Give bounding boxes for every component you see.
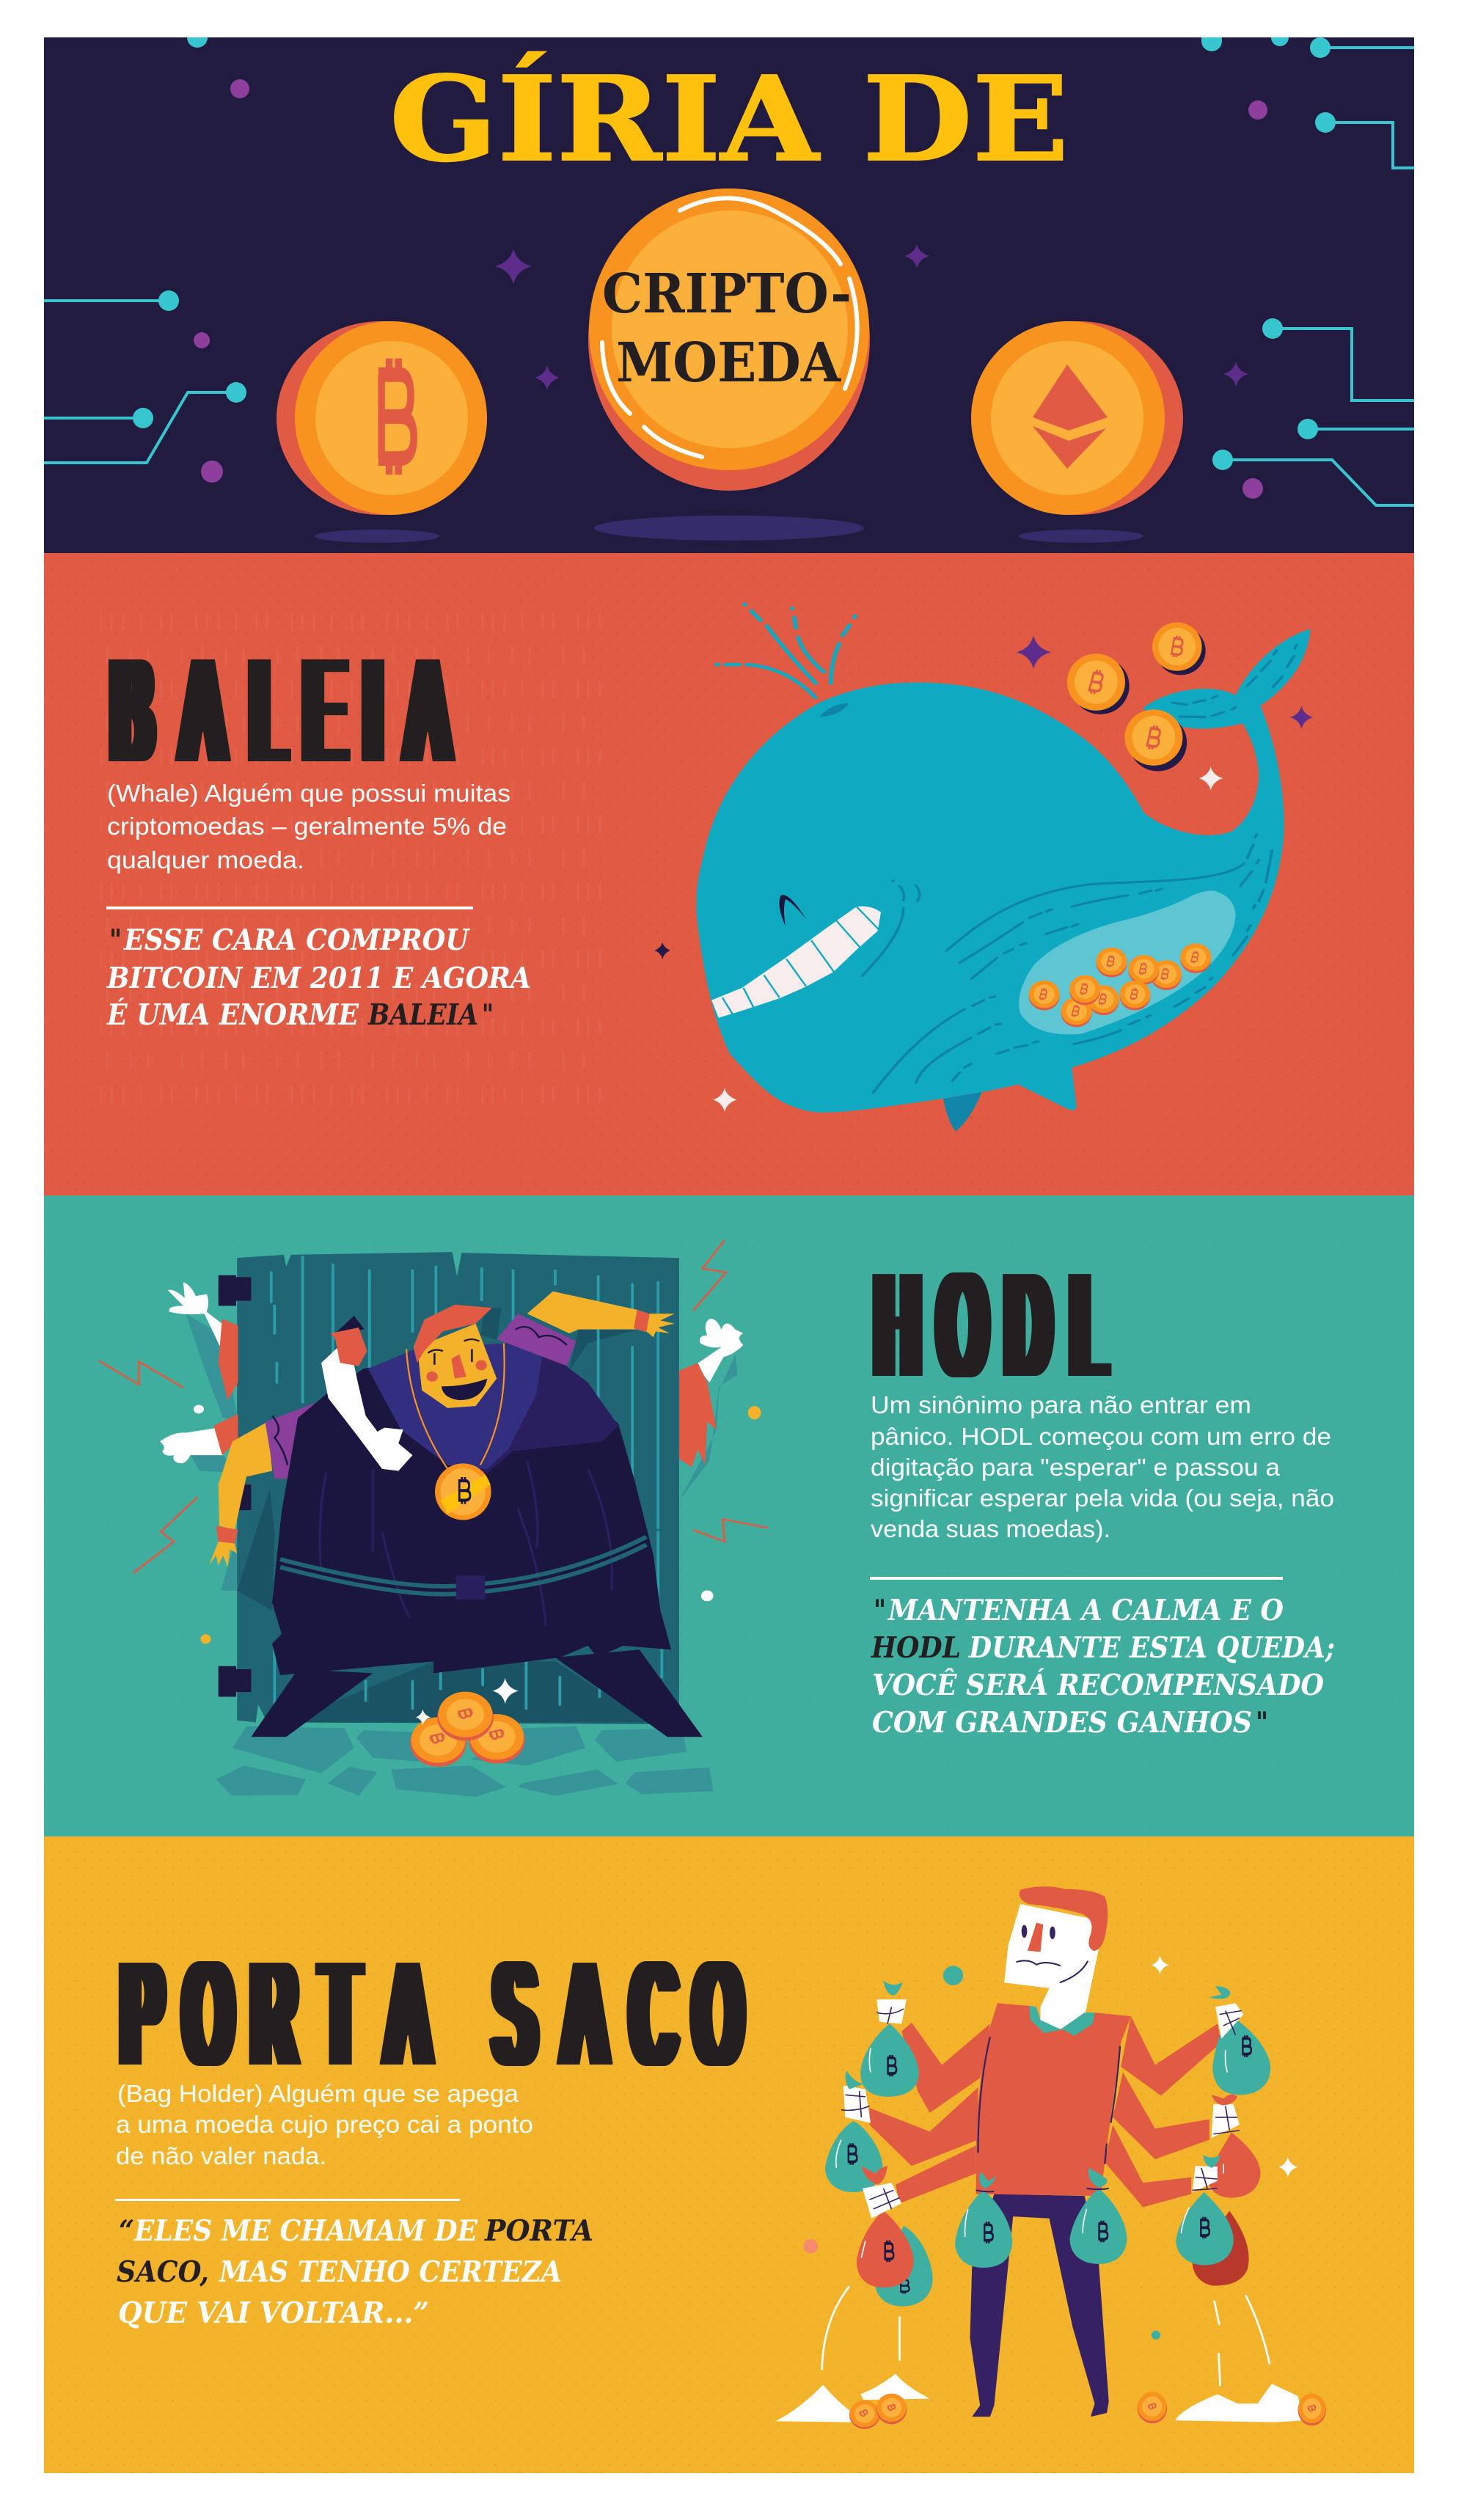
white arm: [321, 1316, 412, 1471]
blue collar: [368, 1343, 543, 1469]
neck and head: [1004, 1886, 1108, 2029]
circuit nodes: [133, 37, 1336, 470]
legs: [251, 1649, 703, 1737]
icon: ethereum coin: [971, 321, 1183, 515]
bag: middle right red: [1207, 2095, 1260, 2198]
bitcoin medal: [435, 1463, 491, 1520]
ground coins: [849, 2392, 1326, 2429]
purple sparkles: [495, 244, 1248, 390]
quote: baleia: [106, 923, 531, 1032]
panel: baleia: [44, 553, 1414, 1195]
quote: baleia: BALEIA: [367, 998, 478, 1032]
cloak: [272, 1343, 671, 1675]
bag: center left: [955, 2172, 1012, 2268]
quote: baleia: É UMA ENORME: [106, 997, 359, 1032]
quote: baleia: ": [109, 923, 122, 957]
left yellow arm: [209, 1399, 326, 1567]
panel: porta saco: [44, 1836, 1414, 2473]
definition: hodl: digitação para "esperar" e passou a: [871, 1454, 1281, 1481]
belt: [280, 1537, 646, 1594]
decorative dots: [803, 1966, 1160, 2340]
sweater collar: [1029, 2006, 1095, 2036]
bag: middle left: [825, 2070, 882, 2192]
floor stones: [216, 1726, 714, 1797]
panel: header: [44, 37, 1414, 553]
quote: baleia: ": [482, 998, 494, 1032]
falling lines: [822, 2287, 1270, 2386]
falling coins: [1067, 622, 1206, 772]
bag: lower left red: [857, 2166, 914, 2288]
coin title line 2: MOEDA: [616, 332, 841, 395]
definition: baleia: qualquer moeda.: [107, 846, 304, 873]
definition: hodl: significar esperar pela vida (ou seja, não: [871, 1484, 1334, 1512]
whale teeth: [711, 906, 881, 1018]
illustration: hodler at door: [99, 1240, 768, 1797]
bag: back left: [876, 2226, 933, 2307]
quote: hodl: COM GRANDES GANHOS: [872, 1706, 1252, 1740]
bag highlights: [836, 2048, 1228, 2257]
definition: hodl: Um sinônimo para não entrar em: [871, 1391, 1251, 1418]
head: [414, 1305, 497, 1408]
quote: baleia: BITCOIN EM 2011 E AGORA: [106, 962, 531, 995]
quote: hodl: VOCÊ SERÁ RECOMPENSADO: [872, 1668, 1324, 1702]
quote: porta saco: SACO,: [117, 2255, 209, 2289]
sparkles: [416, 1678, 519, 1725]
definition: porta saco: de não valer nada.: [116, 2142, 326, 2169]
whale belly fin: [943, 1092, 982, 1132]
quote: porta saco: MAS TENHO CERTEZA: [218, 2255, 562, 2289]
upper right arm: [497, 1292, 675, 1366]
door shading: [237, 1308, 648, 1722]
belt buckle: [456, 1576, 485, 1600]
door: [237, 1252, 679, 1724]
definition: hodl: pânico. HODL começou com um erro de: [871, 1423, 1331, 1450]
quote: porta saco: “: [119, 2214, 134, 2248]
sweater: [976, 2003, 1131, 2196]
definition: baleia: criptomoedas – geralmente 5% de: [107, 813, 507, 840]
title: GÍRIA DE: [389, 51, 1069, 188]
definition: porta saco: a uma moeda cujo preço cai a ponto: [116, 2111, 533, 2138]
dots: [194, 1405, 761, 1644]
door planks: [271, 1257, 662, 1721]
bag: lower right: [1176, 2155, 1234, 2265]
definition: hodl: [871, 1391, 1334, 1542]
bag: upper right: [1209, 1986, 1270, 2095]
coin shadows: [315, 516, 1143, 543]
definition: hodl: venda suas moedas).: [871, 1515, 1110, 1542]
quote: porta saco: [117, 2214, 593, 2330]
dust piles: [776, 2373, 1304, 2422]
whale skin lines: [863, 645, 1296, 1093]
definition: porta saco: (Bag Holder) Alguém que se apega: [117, 2080, 519, 2107]
arm shadows: [186, 1314, 738, 1591]
whale body: [696, 629, 1311, 1113]
panel: hodl: [44, 1195, 1414, 1836]
quote: porta saco: ELES ME CHAMAM DE: [133, 2214, 478, 2248]
heading: baleia: BALEIA: [112, 629, 447, 792]
sweater folds: [978, 2037, 1120, 2164]
quote: hodl: ": [1256, 1706, 1268, 1740]
icon: bitcoin coin: [277, 321, 487, 515]
cloak shoulder: [368, 1343, 618, 1473]
arms: [869, 2016, 1221, 2207]
whale blowhole: [819, 703, 849, 717]
illustration: bag holder: [776, 1886, 1326, 2429]
sparkles: [654, 635, 1313, 1112]
lightning bolts: [99, 1240, 768, 1573]
definition: baleia: (Whale) Alguém que possui muitas: [107, 780, 510, 807]
gold chain: [406, 1343, 505, 1469]
definition: baleia: [107, 780, 510, 873]
whale eye: [779, 895, 806, 926]
quote: porta saco: QUE VAI VOLTAR...”: [118, 2296, 429, 2330]
circuit lines: [44, 48, 1414, 505]
quote: hodl: [871, 1594, 1335, 1740]
cloak folds: [320, 1461, 612, 1626]
whale belly patch: [1019, 891, 1235, 1034]
definition: porta saco: [116, 2080, 533, 2169]
quote: baleia: ESSE CARA COMPROU: [123, 923, 470, 957]
bag: back right dark: [1193, 2211, 1249, 2286]
icon: central coin: [588, 188, 870, 491]
outer hands and sleeves: [160, 1282, 743, 1467]
quote: hodl: DURANTE ESTA QUEDA;: [968, 1631, 1335, 1665]
pants: [970, 2194, 1109, 2417]
quote: hodl: ": [874, 1594, 886, 1627]
heading: hodl: HODL: [876, 1244, 1105, 1407]
heading: porta saco: PORTA SACO: [122, 1933, 741, 2095]
coin title line 1: CRIPTO-: [602, 263, 852, 326]
white sparkles: [1151, 1956, 1298, 2177]
bag: upper left: [860, 1981, 919, 2097]
illustration: whale: [654, 604, 1313, 1132]
quote: porta saco: PORTA: [484, 2214, 593, 2248]
coin pile: [410, 1692, 524, 1767]
quote: hodl: MANTENHA A CALMA E O: [887, 1594, 1284, 1627]
whale spout: [717, 604, 855, 697]
hinges: [219, 1275, 251, 1697]
quote: hodl: HODL: [871, 1631, 961, 1665]
purple dots: [194, 79, 1267, 499]
belly coins: [1029, 943, 1211, 1028]
bag: center right: [1070, 2168, 1127, 2264]
